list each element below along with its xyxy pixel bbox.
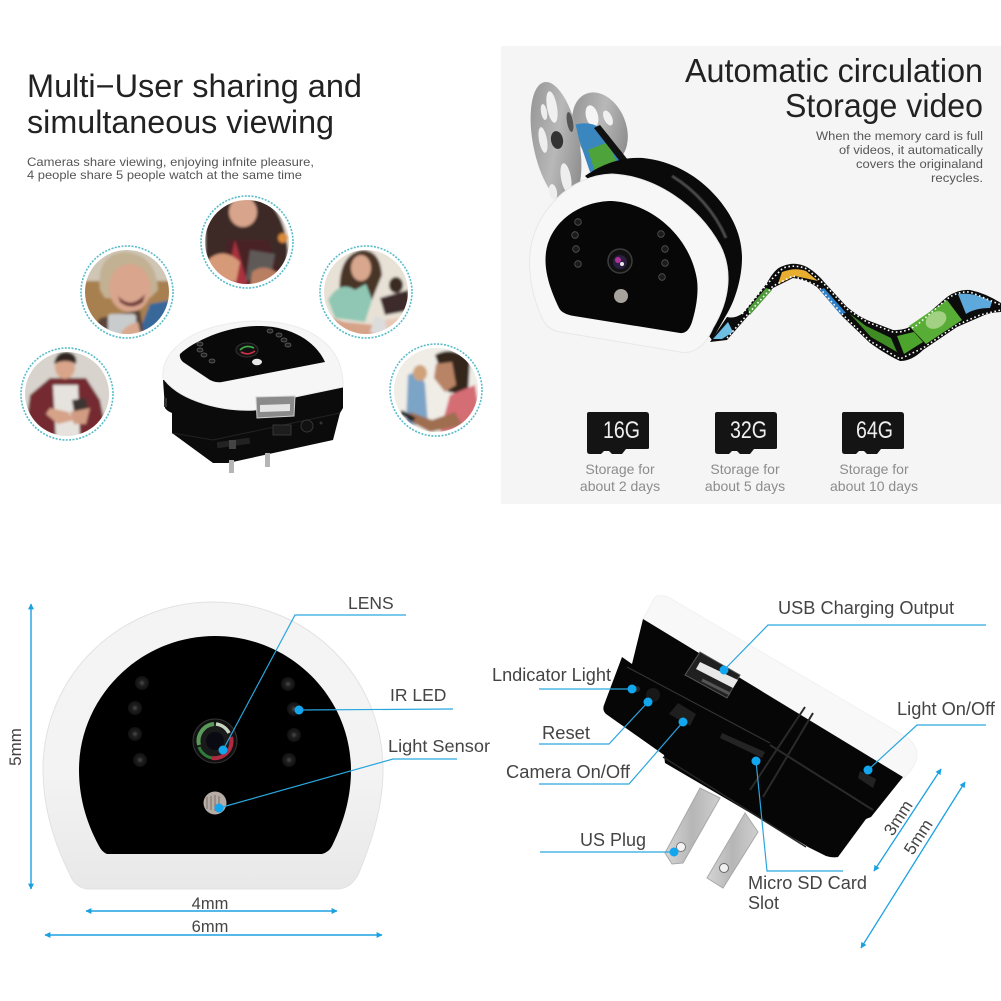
description text: Cameras share viewing, enjoying infnite pleasure, — [27, 156, 314, 169]
heading: automatic circulation: Storage video — [785, 87, 983, 124]
description text: 4 people share 5 people watch at the same time — [27, 169, 302, 182]
description text — [27, 156, 314, 182]
callout: reset — [539, 698, 652, 744]
photo: woman with tablet on sofa — [320, 245, 414, 340]
film strip — [710, 264, 1001, 361]
dimension: width 6mm: 6mm — [192, 918, 228, 936]
film reels — [522, 78, 638, 206]
callout: micro SD card slot — [748, 756, 867, 913]
dimension: depth 3mm — [874, 769, 941, 871]
description text — [816, 129, 984, 185]
memory card: 32G: 32G — [730, 417, 767, 444]
device side: white shell — [643, 596, 917, 779]
callout: light on/off: Light On/Off — [897, 699, 996, 719]
memory card: 64G: Storage for — [839, 461, 909, 477]
photo: bearded man in pink shirt — [390, 344, 484, 439]
callout: micro SD card slot: Slot — [748, 893, 779, 913]
callout: USB charging output: USB Charging Output — [778, 598, 954, 618]
callout: lens: LENS — [348, 593, 394, 613]
device front: black panel — [79, 636, 351, 854]
callout: camera on/off: Camera On/Off — [506, 762, 631, 782]
panel: multi-user sharing — [20, 68, 484, 473]
heading: multi-user sharing: simultaneous viewing — [27, 104, 334, 140]
panel: front view diagram — [6, 593, 490, 936]
photo: man in red jacket with phone — [20, 348, 114, 444]
callout: light sensor: Light Sensor — [388, 736, 490, 756]
memory card: 16G: Storage for — [585, 461, 655, 477]
heading: automatic circulation: Automatic circulation — [685, 52, 983, 89]
device front: white shell — [43, 602, 383, 889]
memory card: 64G: 64G — [856, 417, 893, 444]
description text: of videos, it automatically — [839, 143, 984, 157]
callout: lens — [218, 593, 406, 754]
heading: multi-user sharing: Multi−User sharing and — [27, 68, 362, 104]
callout: USB charging output — [720, 598, 986, 674]
dimension: width 4mm: 4mm — [192, 895, 228, 913]
memory card: 32G: about 5 days — [705, 478, 785, 494]
device side: black body — [603, 619, 903, 857]
memory card: 64G — [830, 412, 918, 494]
callout: indicator light: Lndicator Light — [492, 665, 611, 685]
memory card: 32G — [705, 412, 785, 494]
description text: covers the originaland — [856, 157, 983, 171]
callout: reset: Reset — [542, 723, 590, 743]
panel: automatic circulation — [501, 46, 1001, 504]
dimension: height 5mm: 5mm — [6, 728, 25, 766]
lens — [193, 719, 237, 763]
memory card: 16G: about 2 days — [580, 478, 660, 494]
callout: camera on/off — [506, 718, 688, 784]
callout: micro SD card slot: Micro SD Card — [748, 873, 867, 893]
photo: older woman with phone — [80, 245, 175, 340]
dimension: depth 3mm: 3mm — [880, 797, 917, 839]
memory card: 32G: Storage for — [710, 461, 780, 477]
callout: indicator light — [492, 665, 636, 694]
dimension: depth 5mm: 5mm — [900, 816, 937, 858]
camera device with film drum — [530, 158, 742, 352]
panel background — [501, 46, 1001, 504]
light sensor — [204, 792, 226, 814]
callout: US plug: US Plug — [580, 830, 646, 850]
description text: When the memory card is full — [816, 129, 983, 143]
memory card: 16G — [580, 412, 660, 494]
panel: side view diagram — [492, 596, 996, 948]
callout: light on/off — [864, 699, 996, 774]
heading: multi-user sharing — [27, 68, 362, 140]
memory card: 16G: 16G — [603, 417, 640, 444]
description text: recycles. — [931, 171, 983, 185]
callout: US plug — [540, 830, 678, 856]
US plug prongs — [665, 788, 758, 888]
photo: woman with phone, top — [200, 195, 294, 290]
callout: IR LED — [294, 685, 453, 714]
heading: automatic circulation — [685, 52, 983, 124]
body grooves and ports — [627, 652, 876, 847]
memory card: 64G: about 10 days — [830, 478, 918, 494]
dimension: depth 5mm — [861, 782, 965, 948]
device: camera charger with white top — [163, 321, 343, 473]
IR LED array — [128, 676, 301, 767]
callout: IR LED: IR LED — [390, 685, 446, 705]
callout: light sensor — [214, 736, 490, 812]
